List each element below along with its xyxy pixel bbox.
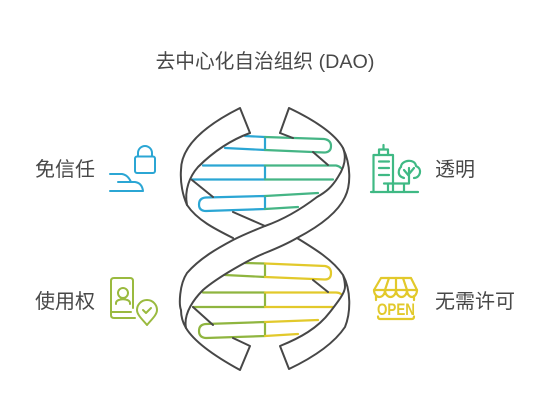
icon text: OPEN: OPEN bbox=[377, 300, 415, 319]
icon: id card with verified pin bbox=[111, 278, 157, 325]
rungs: top left blue bbox=[192, 136, 265, 211]
icon: building and tree bbox=[371, 145, 420, 192]
label: 透明: 透明 bbox=[435, 158, 475, 181]
DNA helix diagram bbox=[180, 108, 349, 370]
label: 使用权: 使用权 bbox=[35, 290, 95, 313]
rungs: bottom left olive bbox=[193, 263, 265, 338]
label: 免信任: 免信任 bbox=[35, 158, 95, 181]
rungs: top right green bbox=[265, 137, 341, 209]
helix ribbons bbox=[180, 108, 349, 370]
rungs: bottom right yellow bbox=[265, 264, 341, 336]
icon: lock and hand bbox=[110, 146, 155, 191]
icon: open shop bbox=[374, 278, 417, 319]
label: 无需许可: 无需许可 bbox=[435, 290, 515, 313]
title: 去中心化自治组织 (DAO) bbox=[156, 51, 374, 73]
